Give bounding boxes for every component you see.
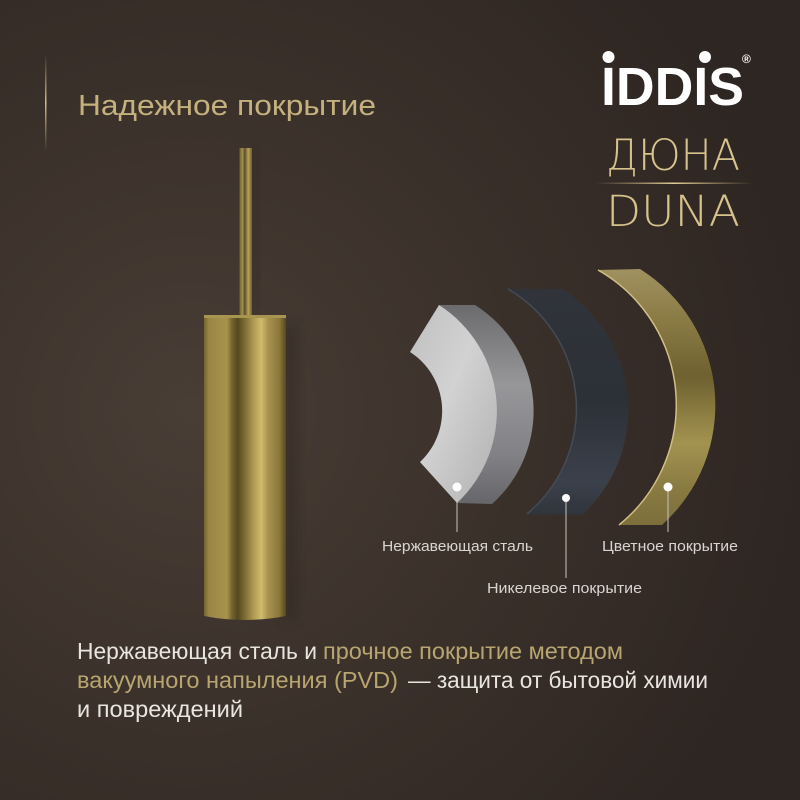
description text: — защита от бытовой химии [408,667,708,693]
description text: вакуумного напыления (PVD) [77,667,398,693]
series name: Дюна / Duna: DUNA [606,187,740,237]
series name: Дюна / Duna: ДЮНА [606,131,740,181]
description text: Нержавеющая сталь и [77,638,317,664]
layer: colour coating [598,269,715,525]
title: Надежное покрытие [78,90,376,122]
description text: и повреждений [77,696,243,722]
logo: IDDIS: IDDIS [601,57,744,117]
description text: прочное покрытие методом [323,638,623,664]
callout: nickel coating [487,494,642,597]
callout: stainless steel: Нержавеющая сталь [382,538,533,555]
series name: Дюна / Duna [595,131,753,237]
layer: stainless steel [410,305,534,504]
cylinder body [204,318,286,620]
callout: stainless steel [382,482,533,555]
layer: nickel coating [508,289,628,515]
logo: IDDIS: ® [742,52,751,66]
description text [77,638,708,722]
callout: colour coating [602,482,738,555]
brush handle rod [240,148,252,316]
callout: nickel coating: Никелевое покрытие [487,580,642,597]
callout: colour coating: Цветное покрытие [602,538,738,555]
decorative vertical line [45,54,46,152]
product: brush holder [204,148,298,620]
